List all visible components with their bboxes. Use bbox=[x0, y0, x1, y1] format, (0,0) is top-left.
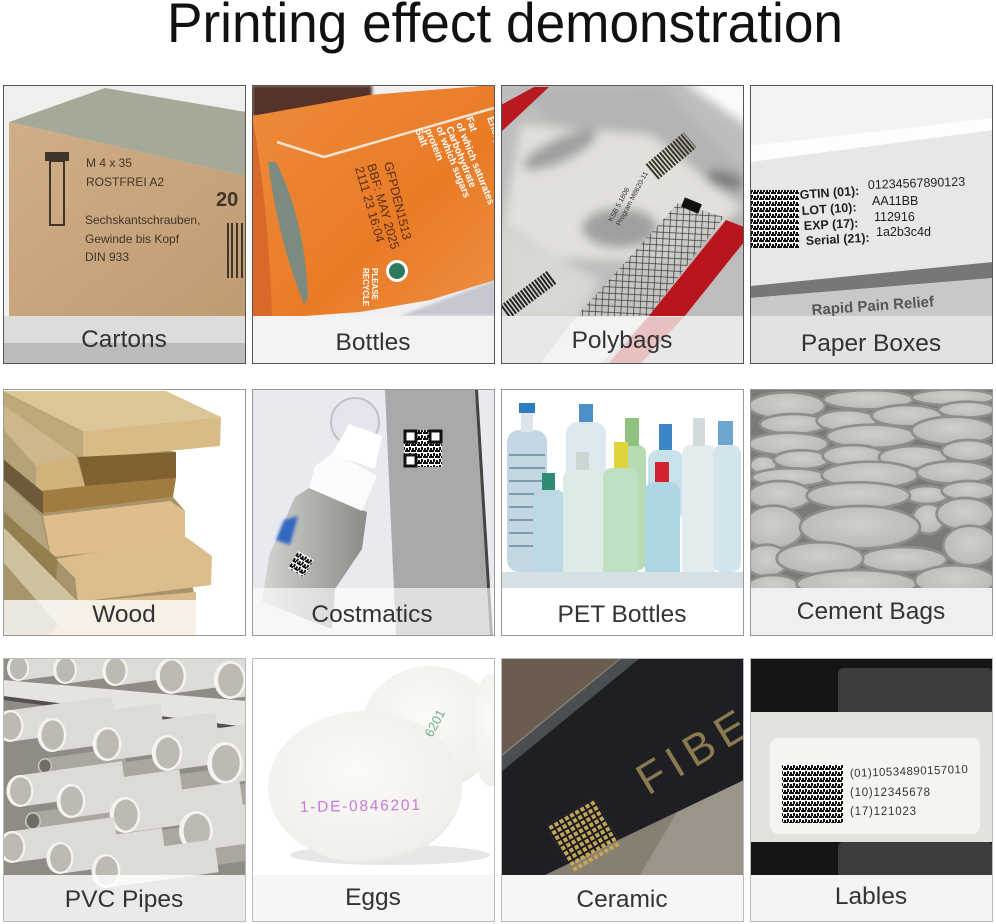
label: ceramic: Ceramic bbox=[576, 886, 668, 913]
carton print: 20 bbox=[216, 189, 238, 211]
QR code: bottle bbox=[288, 551, 314, 577]
label: costmatics: Costmatics bbox=[311, 601, 433, 628]
paper box print: Serial (21): bbox=[805, 231, 870, 248]
front pipes bbox=[4, 696, 245, 888]
nutrition text: protein bbox=[422, 127, 445, 163]
carton print: DIN 933 bbox=[85, 250, 129, 264]
panel: ceramic bbox=[501, 658, 756, 922]
panel: wood bbox=[4, 391, 221, 635]
blue mark bbox=[276, 516, 298, 545]
back pipes bbox=[25, 752, 245, 865]
paper box print: EXP (17): bbox=[803, 216, 859, 233]
nutrition text: Carbohydrate bbox=[443, 125, 478, 190]
carton print: ROSTFREI A2 bbox=[86, 175, 164, 189]
recycle icon: RECYCLE bbox=[361, 268, 370, 307]
panel: eggs: 6201 bbox=[421, 707, 448, 739]
nutrition text bbox=[416, 116, 494, 205]
label: cartons: Cartons bbox=[81, 326, 167, 353]
carton print: Gewinde bis Kopf bbox=[85, 232, 180, 246]
paper box print: 1a2b3c4d bbox=[876, 225, 931, 239]
small print: KSB 5 1808 bbox=[608, 187, 631, 223]
label: PVC pipes: PVC Pipes bbox=[65, 886, 183, 913]
data matrix code bbox=[751, 190, 799, 248]
carton print: Sechskantschrauben, bbox=[85, 213, 200, 227]
label: wood: Wood bbox=[92, 601, 156, 628]
panel: cartons bbox=[3, 85, 246, 364]
bottle print bbox=[355, 162, 411, 249]
panel: polybags bbox=[496, 80, 750, 364]
egg print: 1-DE-0846201 bbox=[300, 797, 420, 816]
panel: PET bottles bbox=[502, 403, 743, 622]
panel: bottles bbox=[252, 85, 506, 364]
paper box print: AA11BB bbox=[872, 194, 918, 208]
paper box print: 01234567890123 bbox=[868, 175, 965, 192]
nutrition text: Energy bbox=[484, 115, 506, 151]
carton print: M 4 x 35 bbox=[86, 156, 132, 170]
sacks bbox=[743, 389, 996, 598]
label: bottles: Bottles bbox=[336, 329, 410, 356]
top row pipes bbox=[7, 659, 245, 699]
bottle group bbox=[507, 403, 741, 584]
bottle print: BBF: MAY 2025 bbox=[364, 162, 402, 251]
carton print bbox=[45, 152, 242, 278]
panel: labels bbox=[750, 658, 993, 922]
panel: PVC pipes bbox=[4, 659, 245, 921]
bottle print: GFPDEN1513 bbox=[381, 160, 414, 241]
panel: labels: (17)121023 bbox=[850, 806, 916, 818]
label: cement bags: Cement Bags bbox=[797, 598, 945, 625]
barcode: top bbox=[652, 140, 690, 172]
paper box print: 112916 bbox=[874, 210, 915, 224]
label: lables: Lables bbox=[835, 883, 907, 910]
paper box print: LOT (10): bbox=[801, 200, 857, 218]
paper box print: GTIN (01): bbox=[799, 184, 860, 202]
label: paper boxes: Paper Boxes bbox=[801, 330, 941, 357]
nutrition text: Salt bbox=[412, 127, 430, 149]
paper box print bbox=[799, 175, 965, 248]
panel: labels: (01)10534890157010 bbox=[850, 764, 968, 780]
panel: paper boxes bbox=[750, 85, 993, 364]
bottle print: 2111 23 16:04 bbox=[352, 165, 387, 244]
label: polybags: Polybags bbox=[572, 327, 672, 354]
long pipe bbox=[3, 680, 246, 727]
nutrition text: Fat bbox=[463, 115, 479, 134]
panel: eggs bbox=[252, 658, 508, 922]
recycle icon bbox=[361, 260, 408, 307]
panel: paper boxes: Rapid Pain Relief bbox=[811, 293, 936, 319]
small print: Program M8620-11 bbox=[616, 171, 650, 227]
QR code: box bbox=[404, 430, 442, 467]
label: PET bottles: PET Bottles bbox=[558, 601, 686, 628]
data matrix label bbox=[782, 764, 843, 823]
recycle icon: PLEASE bbox=[370, 268, 379, 301]
panel: cement bags bbox=[743, 389, 996, 636]
barcode: bottom bbox=[505, 277, 552, 312]
label: eggs: Eggs bbox=[345, 884, 401, 911]
panel: labels: (10)12345678 bbox=[850, 787, 930, 799]
nutrition text: of which sugars bbox=[433, 125, 472, 200]
ceramic print: FIBE bbox=[628, 701, 756, 805]
nutrition text: of which saturates bbox=[453, 121, 496, 207]
panel: cosmetics bbox=[252, 389, 495, 636]
